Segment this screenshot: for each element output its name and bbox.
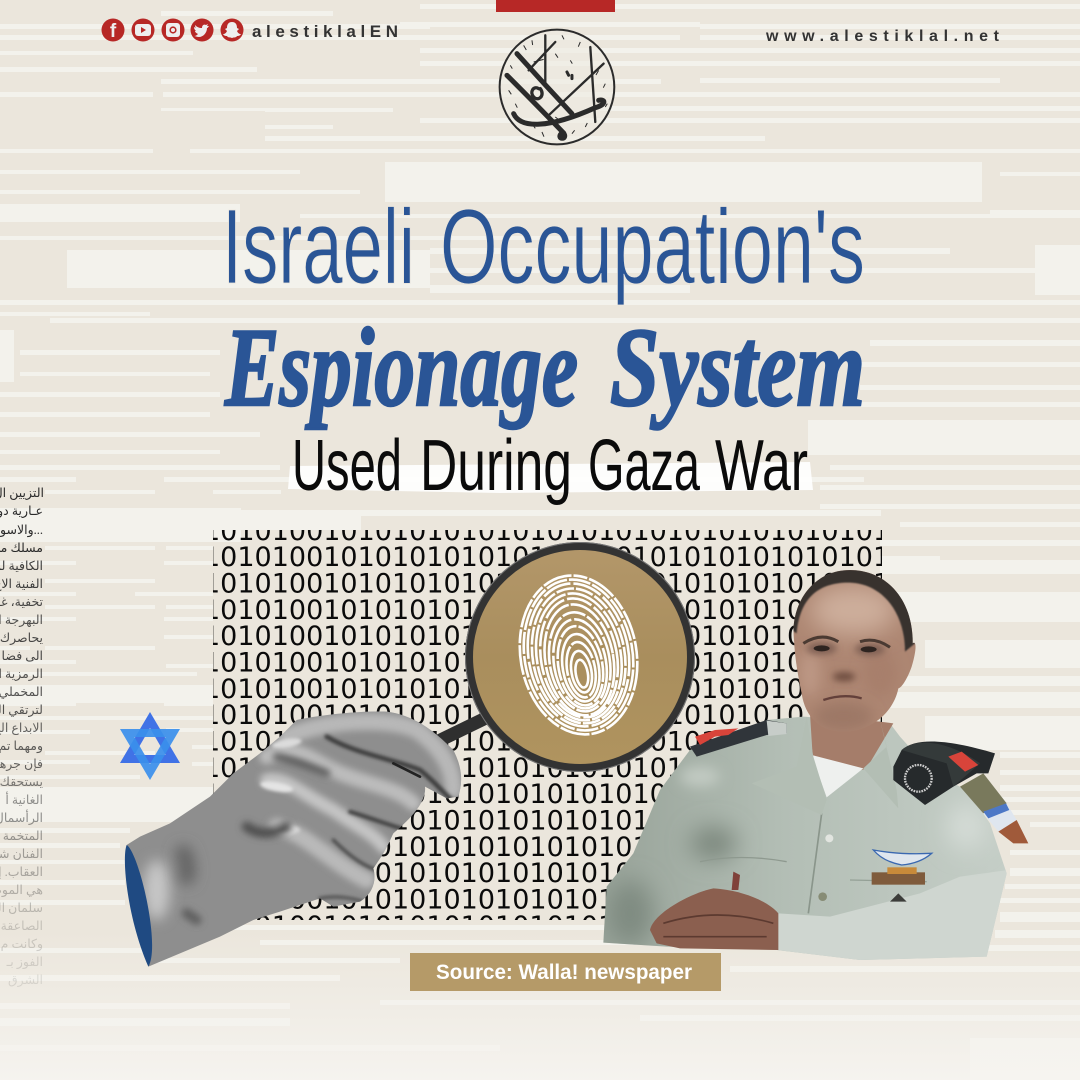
website url: www.alestiklal.net xyxy=(765,28,1000,45)
social handle: alestiklalEN xyxy=(252,22,398,41)
binary code field: 1010100101010101010101010101010101010101 xyxy=(203,674,890,705)
binary code field: 1010100101010101010101010101010101010101 xyxy=(203,700,890,731)
source label xyxy=(410,953,721,991)
binary code field: 1010100101010101010101010101010101010101 xyxy=(203,595,890,626)
binary code field: 1010100101010101010101010101010101010101 xyxy=(203,779,890,810)
arabic newspaper column: الى فضا xyxy=(2,649,43,663)
left epaulette xyxy=(690,720,787,757)
title line 1: Occupation's xyxy=(440,188,865,306)
icon: fingerprint xyxy=(508,566,650,744)
top red tab xyxy=(496,0,615,12)
arabic newspaper column xyxy=(0,486,44,988)
binary code field: 1010100101010101010101010101010101010101 xyxy=(203,753,890,784)
magnifier handle xyxy=(420,715,492,750)
arabic newspaper column: الفوز بـ xyxy=(6,955,43,970)
binary code field: 1010100101010101010101010101010101010101 xyxy=(203,726,890,758)
icon: snapchat xyxy=(220,18,244,42)
title line 2: System xyxy=(610,306,865,430)
wrist cut in blue xyxy=(125,845,152,967)
binary code field: 1010100101010101010101010101010101010101 xyxy=(203,542,890,573)
binary code field xyxy=(213,530,882,920)
wings badge and ribbons xyxy=(872,850,932,885)
arabic newspaper column: الغانية أ xyxy=(5,791,43,807)
arabic newspaper column: وكانت م xyxy=(1,937,43,952)
icon: facebook: f xyxy=(110,21,117,42)
title line 3 xyxy=(292,426,808,506)
arabic newspaper column: الشرق xyxy=(8,973,43,988)
title line 3: During xyxy=(420,426,572,506)
title line 3: Gaza xyxy=(588,426,701,506)
hand shape xyxy=(127,712,461,967)
icon: facebook xyxy=(102,18,124,42)
arabic newspaper column: يستحقك xyxy=(0,775,44,789)
binary code field: 1010100101010101010101010101010101010101 xyxy=(203,911,890,942)
neck xyxy=(810,713,893,777)
binary code field: 1010100101010101010101010101010101010101 xyxy=(203,832,890,863)
title line 2: Espionage xyxy=(224,306,578,430)
head xyxy=(794,570,916,722)
binary code field: 1010100101010101010101010101010101010101 xyxy=(203,884,890,916)
binary code field: 1010100101010101010101010101010101010101 xyxy=(203,621,890,652)
title line 1: Israeli xyxy=(222,188,415,306)
bottom fade xyxy=(0,930,1080,1080)
magnifier lens xyxy=(469,546,691,768)
hand holding magnifier xyxy=(125,712,461,967)
uniform xyxy=(603,717,1007,960)
officer portrait xyxy=(603,567,1028,963)
strap with flag xyxy=(960,773,1028,843)
title line 1 xyxy=(222,188,865,306)
title brush highlight xyxy=(288,462,813,493)
collar xyxy=(752,717,898,815)
social media icons xyxy=(102,18,244,42)
binary code field: 1010100101010101010101010101010101010101 xyxy=(203,858,890,889)
hands xyxy=(650,888,778,950)
magnifying glass xyxy=(420,542,694,772)
title line 3: Used xyxy=(292,426,402,506)
binary code field: 1010100101010101010101010101010101010101 xyxy=(203,648,890,678)
icon: twitter xyxy=(190,18,214,42)
shirt buttons and pins xyxy=(732,834,907,902)
icon: instagram xyxy=(162,18,184,42)
beret on shoulder xyxy=(893,742,995,805)
source label: Source: Walla! newspaper xyxy=(436,961,692,984)
binary code field: 1010100101010101010101010101010101010101 xyxy=(203,516,890,547)
icon: star of David xyxy=(120,712,180,780)
binary code field: 1010100101010101010101010101010101010101 xyxy=(203,806,890,836)
title line 3: War xyxy=(715,426,808,506)
icon: youtube xyxy=(132,18,154,42)
logo seal xyxy=(500,30,614,144)
undershirt xyxy=(812,755,863,797)
binary code field: 1010100101010101010101010101010101010101 xyxy=(203,568,890,600)
